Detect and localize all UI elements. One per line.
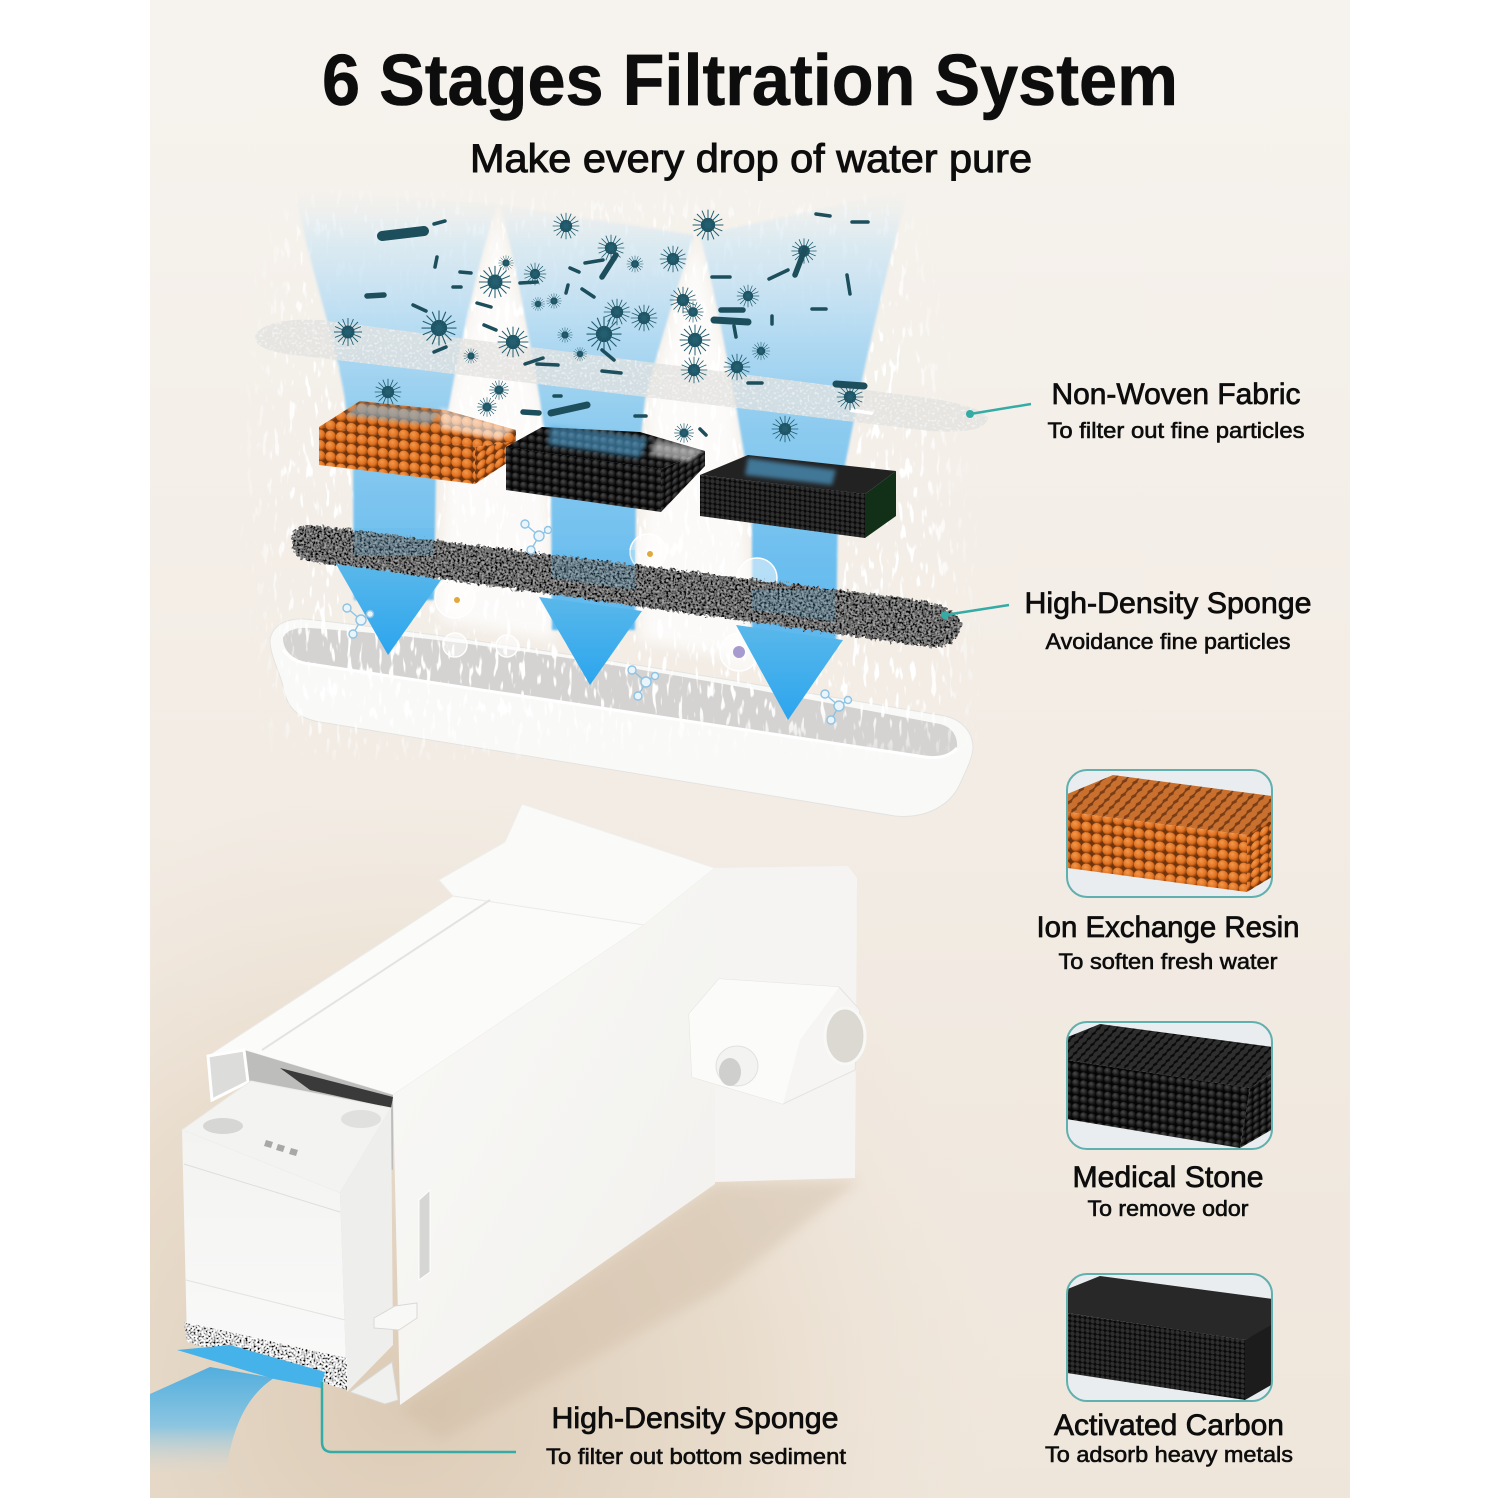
label: high-density sponge: Avoidance fine particles	[1046, 629, 1290, 654]
label: ion exchange resin	[1036, 911, 1300, 974]
leader: high-density sponge	[941, 605, 1009, 619]
main body side face	[393, 868, 715, 1405]
water spray under beams	[240, 190, 980, 760]
blue inflow on sponge	[177, 1345, 325, 1388]
label: bottom sponge: To filter out bottom sediment	[546, 1444, 846, 1469]
label: non-woven fabric	[1048, 378, 1304, 443]
leader: non-woven fabric	[966, 404, 1031, 418]
rear housing top	[439, 804, 715, 925]
tray	[270, 619, 973, 816]
main body top face	[208, 896, 644, 1095]
removable cartridge	[182, 1081, 393, 1392]
cartridge latch	[374, 1303, 417, 1330]
leader: bottom sponge	[322, 1382, 516, 1452]
card: medical stone	[1060, 1022, 1280, 1149]
label: activated carbon	[1045, 1409, 1293, 1467]
device shadow	[400, 1180, 860, 1440]
water nozzle	[716, 1046, 758, 1086]
subtitle: Make every drop of water pure	[470, 137, 1032, 181]
background panel	[150, 0, 1350, 1498]
virus particles	[334, 210, 863, 443]
label: activated carbon: Activated Carbon	[1054, 1409, 1284, 1442]
label: medical stone: Medical Stone	[1072, 1161, 1264, 1194]
label: ion exchange resin: To soften fresh water	[1058, 949, 1278, 974]
label: bottom sponge	[546, 1402, 846, 1469]
water outflow	[150, 1367, 274, 1474]
soft white haze wedges	[440, 215, 752, 660]
label: non-woven fabric: Non-Woven Fabric	[1052, 378, 1300, 411]
label: ion exchange resin: Ion Exchange Resin	[1036, 911, 1300, 944]
label: non-woven fabric: To filter out fine particles	[1048, 418, 1304, 443]
flow overlay on sponge	[354, 528, 836, 622]
card: ion exchange resin	[1060, 770, 1280, 897]
rear housing side	[715, 866, 857, 1182]
label: high-density sponge: High-Density Sponge	[1024, 587, 1312, 620]
bubbles	[435, 534, 777, 671]
non-woven fabric layer	[255, 320, 988, 432]
bottom sponge	[184, 1322, 347, 1390]
card: activated carbon	[1060, 1274, 1280, 1401]
label: activated carbon: To adsorb heavy metals	[1045, 1442, 1293, 1467]
body opening interior	[208, 1050, 393, 1170]
purified molecules	[343, 520, 852, 724]
lid seam	[262, 900, 490, 1050]
valve button	[825, 1008, 865, 1064]
ion exchange resin block	[319, 401, 516, 484]
high-density sponge layer	[292, 525, 962, 647]
bottom rail	[350, 1362, 398, 1404]
medical stone block	[506, 425, 705, 512]
label: medical stone: To remove odor	[1088, 1196, 1248, 1221]
title: 6 Stages Filtration System	[322, 41, 1178, 121]
filter cartridge device	[150, 804, 865, 1474]
water flow beams	[296, 190, 908, 650]
rod bacteria	[367, 214, 868, 435]
label: bottom sponge: High-Density Sponge	[552, 1402, 838, 1435]
flow arrowheads	[336, 564, 843, 720]
label: high-density sponge	[1024, 587, 1312, 654]
side slot	[419, 1190, 430, 1280]
activated carbon block	[700, 455, 896, 538]
label: medical stone	[1072, 1161, 1264, 1221]
exploded filter diagram	[240, 190, 988, 816]
tube connector	[689, 979, 860, 1104]
